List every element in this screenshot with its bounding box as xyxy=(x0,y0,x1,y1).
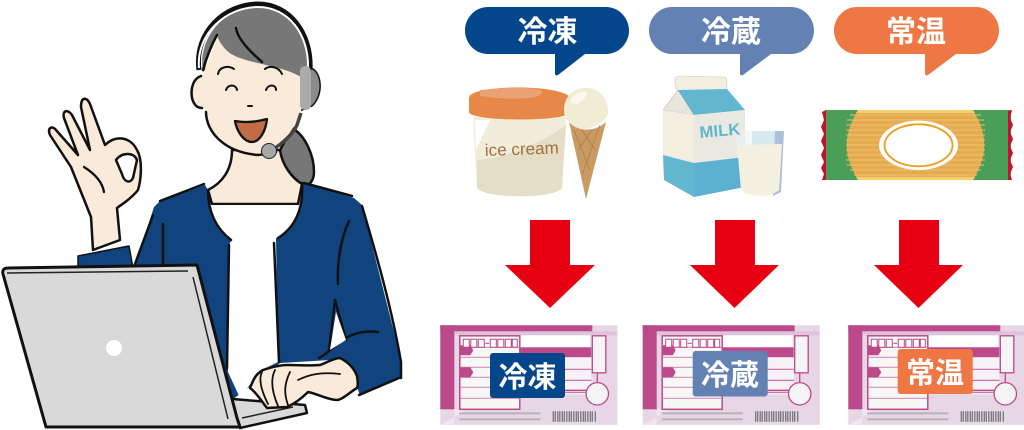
ticket tag: frozen xyxy=(490,353,565,398)
hair xyxy=(202,6,311,77)
ticket tag: frozen: 冷凍 xyxy=(498,361,557,394)
mouth xyxy=(235,119,267,142)
face outlines xyxy=(192,28,276,155)
arrow: refrigerated xyxy=(690,220,779,308)
ticket: frozen xyxy=(440,325,617,425)
jacket outlines xyxy=(135,183,401,395)
icon: ice cream tub and cone xyxy=(469,88,608,199)
ticket: refrigerated xyxy=(643,325,820,425)
speech bubble: refrigerated: 冷蔵 xyxy=(701,16,761,49)
carton label: MILK: MILK xyxy=(699,120,741,142)
eyes and eyebrows xyxy=(218,67,282,106)
ticket tag: ambient xyxy=(898,349,973,394)
speech bubble: ambient: 常温 xyxy=(886,16,946,49)
icon: snack package xyxy=(821,110,1013,180)
ticket tag: ambient: 常温 xyxy=(906,357,964,390)
ticket tag: refrigerated: 冷蔵 xyxy=(701,359,759,392)
ticket: ambient xyxy=(848,325,1024,425)
shirt xyxy=(210,205,298,398)
face xyxy=(192,36,304,155)
OK hand xyxy=(49,99,141,250)
headset xyxy=(198,4,320,158)
typing hand xyxy=(250,358,358,408)
speech bubble: frozen: 冷凍 xyxy=(518,16,578,49)
label text: ice cream: ice cream xyxy=(484,138,559,160)
laptop xyxy=(3,265,307,428)
jacket gap xyxy=(330,312,346,350)
ticket tag: refrigerated xyxy=(693,351,768,396)
ponytail xyxy=(279,128,314,186)
arrow: frozen xyxy=(505,220,595,308)
speech bubble: ambient xyxy=(834,7,999,75)
jacket xyxy=(135,183,401,400)
speech bubble: refrigerated xyxy=(649,7,814,75)
icon: milk carton and glass xyxy=(663,76,784,197)
speech bubble: frozen xyxy=(465,7,629,75)
neck and chest xyxy=(208,150,302,204)
illustration: operator woman with headset and laptop xyxy=(3,4,401,428)
arrow: ambient xyxy=(874,220,963,308)
left sleeve xyxy=(78,246,133,268)
